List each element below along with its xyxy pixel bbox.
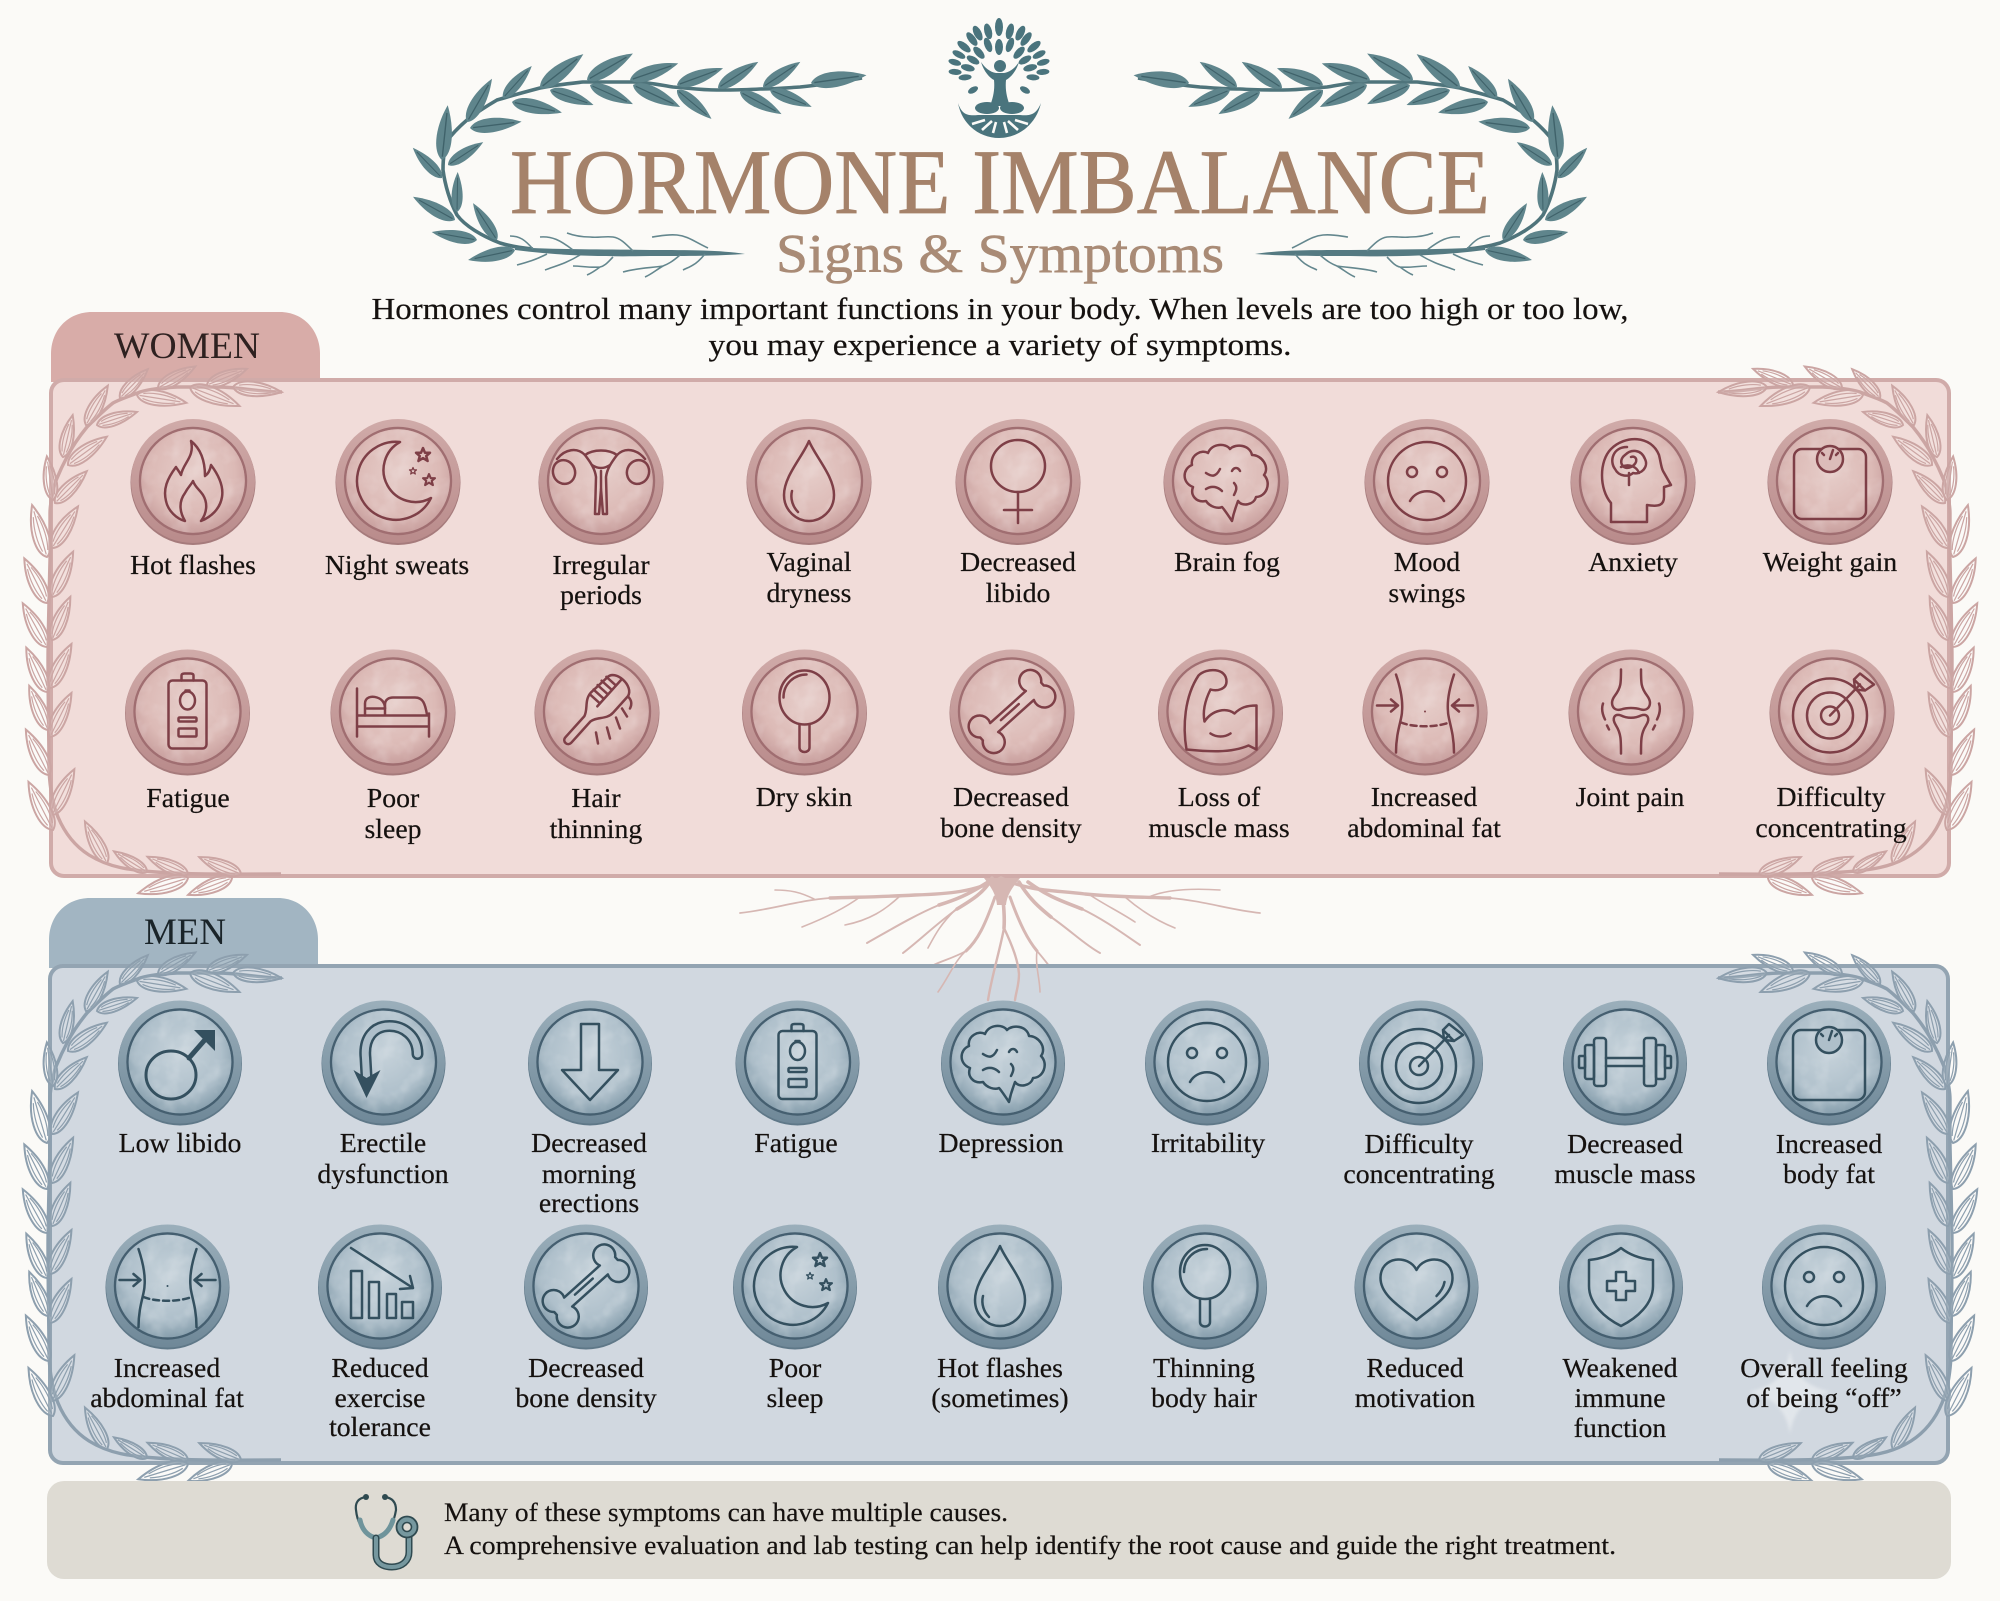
symptom: Increased abdominal fat: [1347, 650, 1501, 844]
symptom: Overall feeling of being off: Overall feeling: [1740, 1353, 1908, 1384]
symptom: Fatigue: [736, 1000, 860, 1159]
symptom: Increased abdominal fat: abdominal fat: [1347, 813, 1501, 844]
symptom: Irritability: Irritability: [1151, 1128, 1265, 1159]
symptom: Irregular periods: periods: [560, 580, 642, 611]
symptom: Anxiety: [1570, 419, 1696, 578]
symptom: Hot flashes (sometimes): [931, 1224, 1069, 1414]
symptom: Erectile dysfunction: dysfunction: [317, 1159, 449, 1190]
laurel: women right: [1717, 361, 1984, 901]
symptom: Thinning body hair: body hair: [1151, 1383, 1258, 1414]
header laurel right: [1132, 47, 1591, 277]
header laurel left: [409, 47, 868, 277]
symptom: Overall feeling of being off: of being “off”: [1746, 1383, 1902, 1414]
symptom: Weakened immune function: Weakened: [1562, 1353, 1678, 1384]
symptom: Reduced exercise tolerance: tolerance: [329, 1412, 431, 1443]
symptom: Low libido: Low libido: [119, 1128, 241, 1159]
symptom: Hot flashes: [130, 419, 256, 581]
symptom: Decreased muscle mass: [1554, 1000, 1696, 1190]
symptom: Weight gain: Weight gain: [1763, 547, 1897, 578]
symptom: Vaginal dryness: [746, 419, 872, 609]
symptom: Difficulty concentrating: concentrating: [1343, 1159, 1495, 1190]
symptom: Brain fog: [1164, 419, 1288, 578]
symptom: Thinning body hair: Thinning: [1153, 1353, 1255, 1384]
symptom: Decreased morning erections: Decreased: [531, 1128, 647, 1159]
symptom: Overall feeling of being off: [1740, 1224, 1908, 1434]
symptom: Poor sleep: [330, 650, 456, 845]
symptom: Erectile dysfunction: Erectile: [340, 1128, 426, 1159]
symptom: Dry skin: Dry skin: [756, 782, 852, 813]
symptom: Loss of muscle mass: Loss of: [1178, 782, 1260, 813]
intro text: you may experience a variety of symptoms.: [708, 327, 1292, 362]
symptom: Loss of muscle mass: [1148, 650, 1290, 844]
laurel: women left: [16, 361, 283, 901]
symptom: Increased abdominal fat: Increased: [114, 1353, 220, 1384]
symptom: Decreased bone density: Decreased: [953, 782, 1069, 813]
symptom: Reduced motivation: Reduced: [1366, 1353, 1464, 1384]
symptom: Night sweats: Night sweats: [325, 550, 469, 581]
footer text: Many of these symptoms can have multiple causes.: [444, 1498, 1008, 1527]
symptom: Decreased morning erections: erections: [539, 1188, 639, 1219]
symptom: Erectile dysfunction: [317, 1000, 449, 1190]
men symptoms grid: [90, 1000, 1908, 1444]
symptom: Decreased morning erections: morning: [542, 1159, 636, 1190]
symptom: Increased body fat: [1767, 1000, 1891, 1190]
panel: women: [51, 312, 1949, 985]
symptom: Irritability: [1145, 1000, 1269, 1159]
symptom: Hot flashes: Hot flashes: [130, 550, 256, 581]
symptom: Reduced exercise tolerance: [318, 1224, 442, 1443]
footer text: [444, 1498, 1616, 1560]
symptom: Fatigue: Fatigue: [146, 783, 230, 814]
icon: tree of life logo: [948, 18, 1050, 138]
symptom: Hair thinning: Hair: [571, 783, 621, 814]
roots: [740, 878, 1260, 985]
symptom: Dry skin: [742, 650, 867, 813]
symptom: Increased abdominal fat: abdominal fat: [90, 1383, 244, 1414]
symptom: Anxiety: Anxiety: [1588, 547, 1678, 578]
symptom: Decreased muscle mass: muscle mass: [1554, 1159, 1696, 1190]
symptom: Loss of muscle mass: muscle mass: [1148, 813, 1290, 844]
subtitle: Signs & Symptoms: [776, 223, 1224, 284]
symptom: Mood swings: swings: [1388, 578, 1466, 609]
symptom: Increased body fat: Increased: [1776, 1129, 1882, 1160]
tab: men: [49, 898, 318, 968]
symptom: Thinning body hair: [1143, 1224, 1267, 1414]
laurel: men left: [16, 947, 283, 1487]
symptom: Fatigue: Fatigue: [754, 1128, 838, 1159]
symptom: Decreased muscle mass: Decreased: [1567, 1129, 1683, 1160]
symptom: Vaginal dryness: dryness: [767, 578, 851, 609]
symptom: Hair thinning: [534, 650, 660, 845]
symptom: Decreased bone density: Decreased: [528, 1353, 644, 1384]
symptom: Difficulty concentrating: Difficulty: [1364, 1129, 1474, 1160]
symptom: Weakened immune function: immune: [1574, 1383, 1666, 1414]
symptom: Difficulty concentrating: [1343, 1000, 1495, 1190]
symptom: Irregular periods: Irregular: [552, 550, 650, 581]
symptom: Decreased bone density: bone density: [515, 1383, 657, 1414]
symptom: Night sweats: [325, 419, 469, 581]
symptom: Increased abdominal fat: [90, 1224, 244, 1414]
footer text: A comprehensive evaluation and lab testing can help identify the root cause and guide the right treatment.: [444, 1531, 1616, 1560]
symptom: Low libido: [118, 1000, 242, 1159]
symptom: Brain fog: Brain fog: [1174, 547, 1280, 578]
intro text: [372, 291, 1628, 362]
symptom: Increased body fat: body fat: [1783, 1159, 1875, 1190]
callout: footer note: [47, 1481, 1951, 1579]
symptom: Poor sleep: sleep: [364, 814, 422, 845]
symptom: Decreased morning erections: [528, 1000, 652, 1219]
laurel: men right: [1717, 947, 1984, 1487]
tab: women: [51, 312, 320, 382]
symptom: Poor sleep: sleep: [766, 1383, 824, 1414]
women symptoms grid: [125, 419, 1907, 845]
symptom: Reduced exercise tolerance: Reduced: [331, 1353, 429, 1384]
symptom: Depression: Depression: [938, 1128, 1064, 1159]
symptom: Poor sleep: Poor: [769, 1353, 821, 1384]
symptom: Decreased libido: [956, 419, 1080, 609]
symptom: Poor sleep: Poor: [367, 783, 419, 814]
women panel background: [51, 380, 1949, 876]
symptom: Reduced exercise tolerance: exercise: [334, 1383, 426, 1414]
symptom: Decreased bone density: [940, 650, 1082, 844]
icon: stethoscope: [356, 1494, 418, 1567]
symptom: Mood swings: [1364, 419, 1490, 609]
symptom: Hot flashes (sometimes): Hot flashes: [937, 1353, 1063, 1384]
symptom: Mood swings: Mood: [1394, 547, 1460, 578]
symptom: Depression: [938, 1000, 1065, 1159]
symptom: Decreased libido: Decreased: [960, 547, 1076, 578]
intro text: Hormones control many important functions in your body. When levels are too high or too low,: [372, 291, 1628, 326]
symptom: Decreased libido: libido: [986, 578, 1050, 609]
symptom: Joint pain: [1568, 650, 1694, 813]
symptom: Decreased bone density: [515, 1224, 657, 1414]
symptom: Decreased bone density: bone density: [940, 813, 1082, 844]
symptom: Difficulty concentrating: Difficulty: [1776, 782, 1886, 813]
symptom: Difficulty concentrating: [1755, 650, 1907, 844]
symptom: Irregular periods: [538, 419, 664, 611]
symptom: Difficulty concentrating: concentrating: [1755, 813, 1907, 844]
symptom: Hot flashes (sometimes): (sometimes): [931, 1383, 1069, 1414]
symptom: Fatigue: [125, 650, 250, 814]
symptom: Weakened immune function: function: [1574, 1413, 1666, 1444]
roots continuing over men panel: [938, 928, 1040, 1000]
symptom: Reduced motivation: motivation: [1355, 1383, 1475, 1414]
tab: men: MEN: [144, 912, 226, 953]
symptom: Hair thinning: thinning: [550, 814, 642, 845]
men panel background: [50, 966, 1948, 1463]
symptom: Joint pain: Joint pain: [1576, 782, 1685, 813]
tab: women: WOMEN: [114, 326, 260, 367]
symptom: Vaginal dryness: Vaginal: [767, 547, 851, 578]
symptom: Weakened immune function: [1559, 1224, 1683, 1444]
symptom: Weight gain: [1763, 419, 1897, 578]
panel: men: [49, 898, 1948, 1463]
symptom: Reduced motivation: [1354, 1224, 1478, 1414]
symptom: Increased abdominal fat: Increased: [1371, 782, 1477, 813]
symptom: Poor sleep: [733, 1224, 857, 1414]
title: HORMONE IMBALANCE: [510, 131, 1490, 233]
